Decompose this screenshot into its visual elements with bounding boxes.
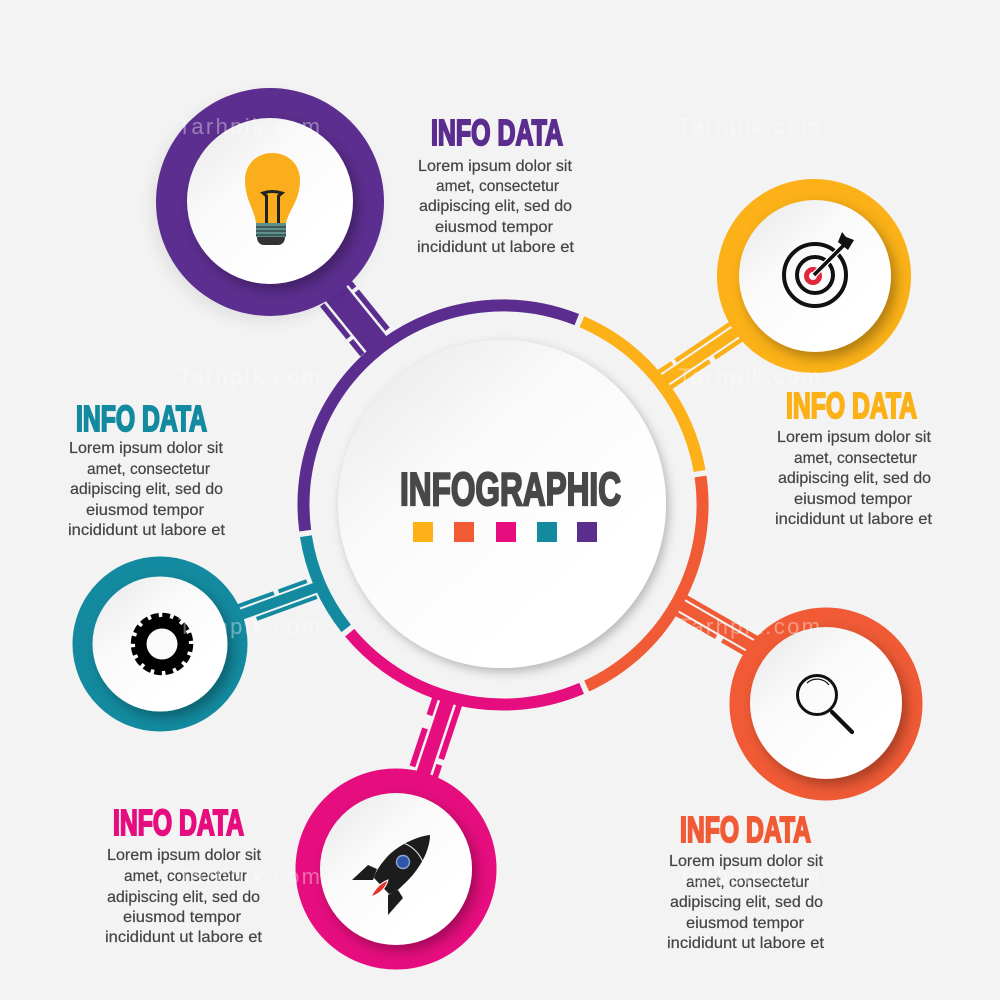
orange ring [730, 608, 922, 800]
white disc [320, 793, 472, 945]
watermarks: Tarhpik.com [678, 864, 820, 889]
body text: amet, consectetur [686, 874, 810, 891]
heading: INFO DATA [786, 385, 917, 426]
body text: incididunt ut labore et [667, 935, 825, 952]
heading: INFO DATA [113, 802, 244, 843]
icon: target [784, 232, 854, 306]
watermarks: Tarhpik.com [178, 614, 320, 639]
body text: adipiscing elit, sed do [670, 894, 823, 911]
icon: rocket [352, 835, 430, 915]
watermarks: Tarhpik.com [178, 864, 320, 889]
ring segment: teal [306, 536, 346, 628]
connector: pink [406, 690, 464, 785]
body text: adipiscing elit, sed do [70, 481, 223, 498]
purple ring [156, 88, 384, 316]
connector: yellow [651, 319, 747, 394]
heading: INFO DATA [76, 398, 207, 439]
text block: pink [105, 802, 263, 946]
node: yellow target [717, 179, 911, 373]
body text: Lorem ipsum dolor sit [669, 853, 824, 870]
central ring [304, 305, 703, 705]
watermarks: Tarhpik.com [178, 364, 320, 389]
watermarks: Tarhpik.com [678, 364, 820, 389]
body text: eiusmod tempor [794, 491, 913, 508]
teal ring [72, 556, 248, 732]
body text [68, 440, 226, 539]
ring segment: yellow [582, 322, 700, 471]
text block: teal [68, 398, 226, 539]
body text: incididunt ut labore et [417, 239, 575, 256]
heading: INFO DATA [431, 112, 563, 153]
ring segment: pink [350, 633, 582, 705]
icon: gear [134, 616, 190, 672]
yellow ring [717, 179, 911, 373]
body text [105, 847, 263, 946]
body text: adipiscing elit, sed do [419, 198, 572, 215]
text block: orange [667, 809, 825, 952]
body text: eiusmod tempor [123, 909, 242, 926]
body text: Lorem ipsum dolor sit [107, 847, 262, 864]
body text: incididunt ut labore et [68, 522, 226, 539]
node: orange magnifier [730, 608, 922, 800]
body text [775, 429, 933, 528]
text block: purple [417, 112, 575, 256]
body text: adipiscing elit, sed do [107, 889, 260, 906]
white disc [187, 118, 353, 284]
body text: amet, consectetur [124, 868, 248, 885]
body text: amet, consectetur [87, 461, 211, 478]
central title: INFOGRAPHIC [400, 463, 621, 515]
body text: adipiscing elit, sed do [778, 470, 931, 487]
body text [667, 853, 825, 952]
icon: light bulb [245, 153, 300, 245]
watermarks [178, 114, 820, 889]
watermarks: Tarhpik.com [678, 614, 820, 639]
connector: teal [235, 576, 322, 626]
pink ring [296, 768, 496, 970]
watermarks: Tarhpik.com [178, 114, 320, 139]
body text: eiusmod tempor [86, 502, 205, 519]
heading: INFO DATA [680, 809, 811, 850]
body text: Lorem ipsum dolor sit [418, 158, 573, 175]
node: pink rocket [296, 768, 496, 970]
central disc [338, 340, 666, 668]
text block: yellow [775, 385, 933, 528]
white disc [739, 200, 891, 352]
body text: Lorem ipsum dolor sit [69, 440, 224, 457]
body text [417, 158, 575, 256]
connector: orange [669, 592, 768, 662]
connector: purple [318, 278, 397, 363]
body text: eiusmod tempor [435, 219, 554, 236]
ring segment: orange [587, 476, 703, 686]
body text: eiusmod tempor [686, 915, 805, 932]
ring segment: purple [304, 305, 577, 531]
white disc [92, 576, 228, 712]
body text: Lorem ipsum dolor sit [777, 429, 932, 446]
white disc [750, 627, 902, 779]
icon: magnifier [798, 676, 852, 732]
body text: incididunt ut labore et [775, 511, 933, 528]
body text: incididunt ut labore et [105, 929, 263, 946]
watermarks: Tarhpik.com [678, 114, 820, 139]
node: purple bulb [156, 88, 384, 316]
node: teal gear [72, 556, 248, 732]
body text: amet, consectetur [794, 450, 918, 467]
colour squares [413, 522, 597, 542]
body text: amet, consectetur [436, 178, 560, 195]
